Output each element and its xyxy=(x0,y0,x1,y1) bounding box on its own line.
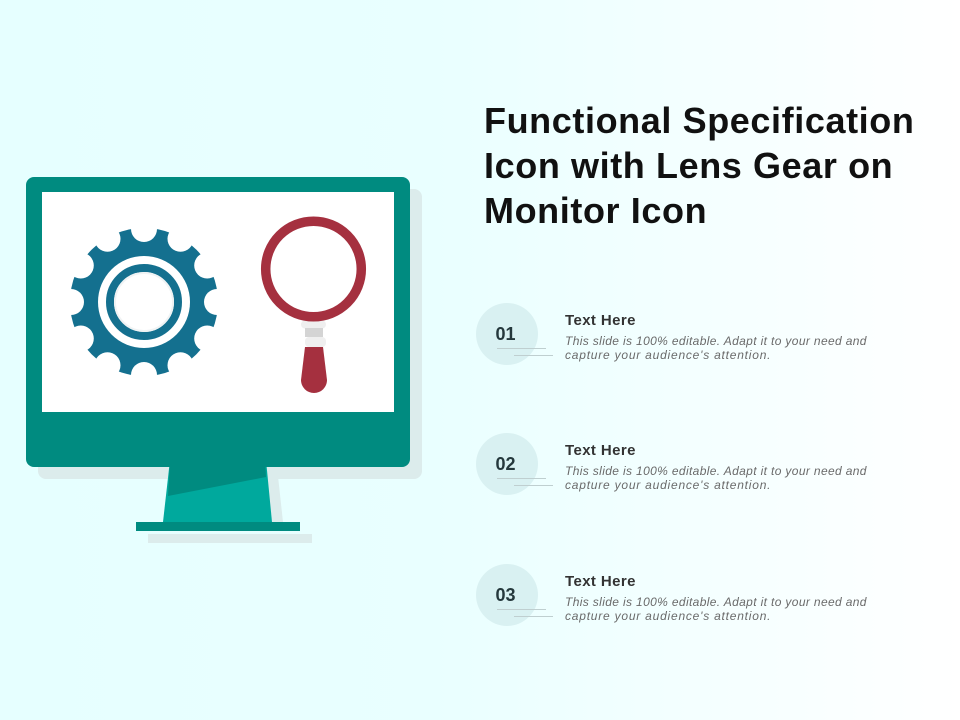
item 01 xyxy=(476,303,867,365)
item 01: capture your audience's attention. xyxy=(565,348,771,362)
item 02 xyxy=(476,433,867,495)
item 01: This slide is 100% editable. Adapt it to your need and xyxy=(565,334,867,348)
item 03: 03 xyxy=(495,585,516,605)
item 01: Text Here xyxy=(565,312,636,328)
icon: magnifying lens xyxy=(266,221,361,393)
title: Functional Specification xyxy=(484,100,914,141)
title: Monitor Icon xyxy=(484,190,707,231)
item 02: capture your audience's attention. xyxy=(565,478,771,492)
item 02: 02 xyxy=(495,454,516,474)
icon: gear xyxy=(58,216,230,388)
title xyxy=(484,100,914,231)
monitor shadow xyxy=(38,189,422,543)
item 03 xyxy=(476,564,867,626)
title: Icon with Lens Gear on xyxy=(484,145,893,186)
item 03: Text Here xyxy=(565,572,636,590)
item 03: capture your audience's attention. xyxy=(565,608,771,622)
item 02: Text Here xyxy=(565,442,636,458)
monitor body xyxy=(26,177,410,467)
item 01: 01 xyxy=(495,324,516,344)
item 02: This slide is 100% editable. Adapt it to your need and xyxy=(565,464,867,478)
monitor illustration xyxy=(26,177,422,543)
item 03: This slide is 100% editable. Adapt it to your need and xyxy=(565,594,867,608)
monitor screen xyxy=(42,192,394,412)
monitor stand xyxy=(136,460,300,531)
